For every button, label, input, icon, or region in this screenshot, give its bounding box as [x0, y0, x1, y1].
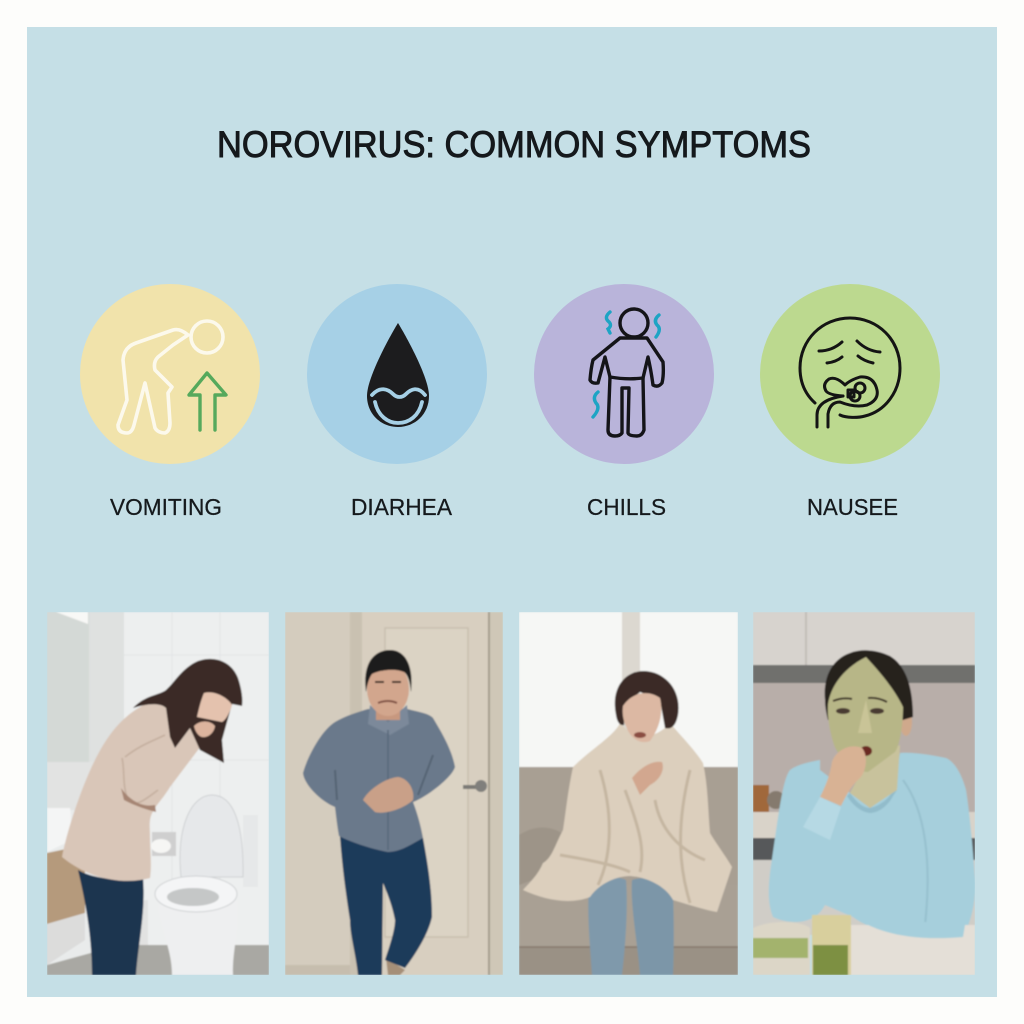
symptom: chills icon: [534, 284, 714, 464]
icon: green up arrow: [189, 373, 226, 430]
symptom: vomiting icon: [80, 284, 260, 464]
icon: outlined person: [590, 309, 663, 436]
title: NOROVIRUS: COMMON SYMPTOMS: [217, 124, 811, 165]
photo: man holding stomach by door: [285, 612, 503, 975]
symptom: diarrhea icon: [307, 284, 487, 464]
photo: woman vomiting in bathroom: [47, 612, 269, 975]
photo: nauseous woman in kitchen: [753, 612, 975, 975]
icon: waves in drop: [372, 389, 425, 423]
icon: queasy face: [800, 318, 900, 427]
icon: bent-over figure: [118, 321, 223, 433]
label: chills: CHILLS: [587, 494, 666, 520]
icon: water drop: [367, 323, 429, 427]
label: vomiting: VOMITING: [110, 494, 222, 520]
symptom: nausea icon: [760, 284, 940, 464]
icon: shiver marks: [593, 312, 659, 417]
photo: woman with blanket on sofa: [519, 612, 738, 975]
label: diarhea: DIARHEA: [351, 494, 453, 520]
label: nausee: NAUSEE: [807, 494, 898, 520]
